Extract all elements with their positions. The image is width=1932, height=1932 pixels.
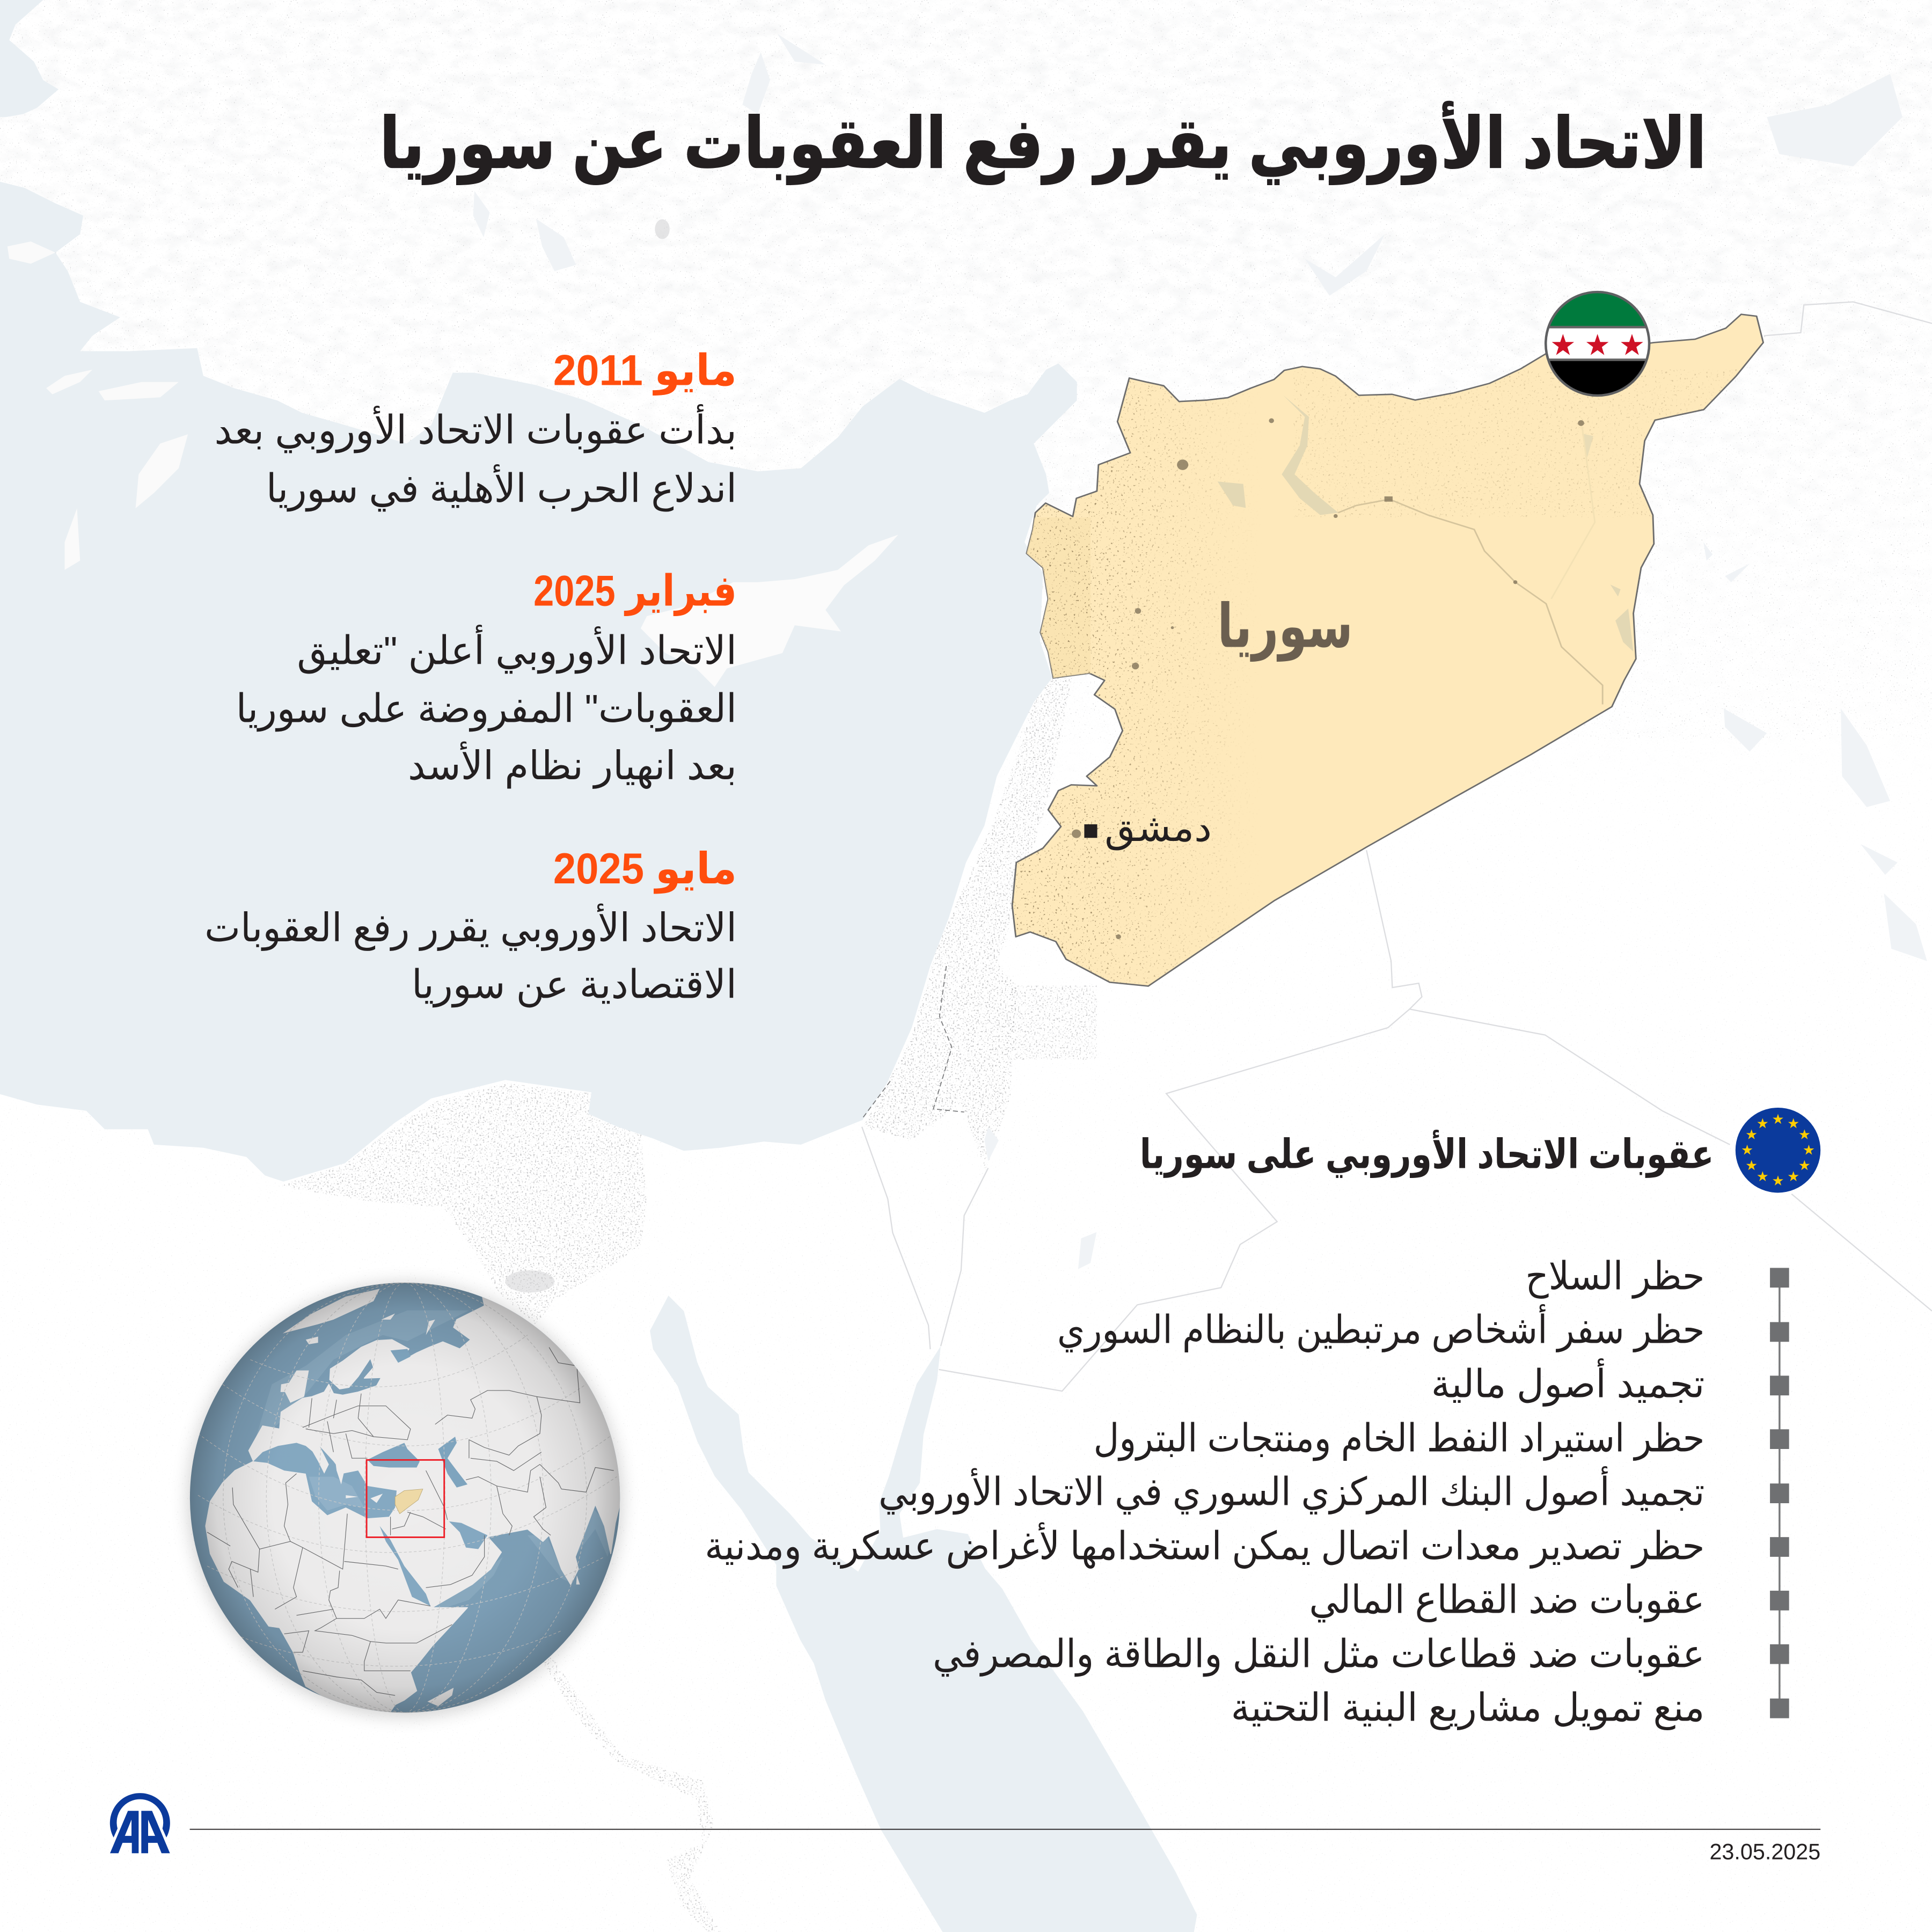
icon: Syrian flag [1543, 290, 1652, 397]
icon: EU flag [1736, 1108, 1820, 1192]
marker: Damascus [1084, 824, 1097, 838]
list items: عقوبات ضد القطاع المالي [1309, 1578, 1704, 1622]
timeline text: February 2025 [236, 625, 737, 789]
timeline text: May 2011: اندلاع الحرب الأهلية في سوريا [266, 464, 737, 512]
timeline date: May 2011: مايو 2011 [553, 346, 737, 396]
timeline text: February 2025: الاتحاد الأوروبي أعلن "تعليق [297, 625, 737, 674]
list items: حظر السلاح [1525, 1255, 1704, 1299]
map: Syria [1011, 314, 1763, 992]
panel: timeline [204, 346, 737, 1008]
date: 23.05.2025 [1709, 1840, 1820, 1864]
list items: تجميد أصول البنك المركزي السوري في الاتحاد الأوروبي [879, 1466, 1704, 1514]
list connector line [1779, 1278, 1781, 1708]
globe locator [189, 1283, 654, 1723]
timeline text: May 2011: بدأت عقوبات الاتحاد الأوروبي بعد [214, 404, 737, 453]
list items: حظر سفر أشخاص مرتبطين بالنظام السوري [1057, 1305, 1704, 1353]
label: Damascus: دمشق [1104, 807, 1212, 851]
footer rule [190, 1829, 1820, 1830]
list items: منع تمويل مشاريع البنية التحتية [1231, 1686, 1704, 1730]
list items: عقوبات ضد قطاعات مثل النقل والطاقة والمصرفي [933, 1633, 1704, 1677]
logo: Anadolu Agency [110, 1793, 170, 1853]
list items: تجميد أصول مالية [1431, 1359, 1704, 1407]
timeline text: May 2025: الاقتصادية عن سوريا [412, 962, 737, 1008]
label: Syria: سوريا [1217, 592, 1353, 662]
panel: sanctions list [705, 1255, 1789, 1730]
timeline text: May 2011 [214, 404, 737, 512]
title: الاتحاد الأوروبي يقرر رفع العقوبات عن سوريا [379, 101, 1707, 185]
list items [705, 1255, 1704, 1730]
heading text: عقوبات الاتحاد الأوروبي على سوريا [1140, 1130, 1714, 1179]
timeline date: February 2025: فبراير 2025 [533, 567, 737, 616]
bullets [1770, 1268, 1789, 1718]
timeline text: February 2025: بعد انهيار نظام الأسد [408, 741, 737, 789]
timeline text: May 2025 [204, 903, 737, 1008]
timeline date: May 2025: مايو 2025 [553, 845, 737, 894]
list items: حظر تصدير معدات اتصال يمكن استخدامها لأغراض عسكرية ومدنية [705, 1522, 1704, 1569]
list items: حظر استيراد النفط الخام ومنتجات البترول [1094, 1417, 1704, 1461]
panel heading: EU sanctions [1140, 1108, 1820, 1192]
timeline text: February 2025: العقوبات" المفروضة على سوريا [236, 686, 737, 731]
timeline text: May 2025: الاتحاد الأوروبي يقرر رفع العقوبات [204, 903, 737, 951]
